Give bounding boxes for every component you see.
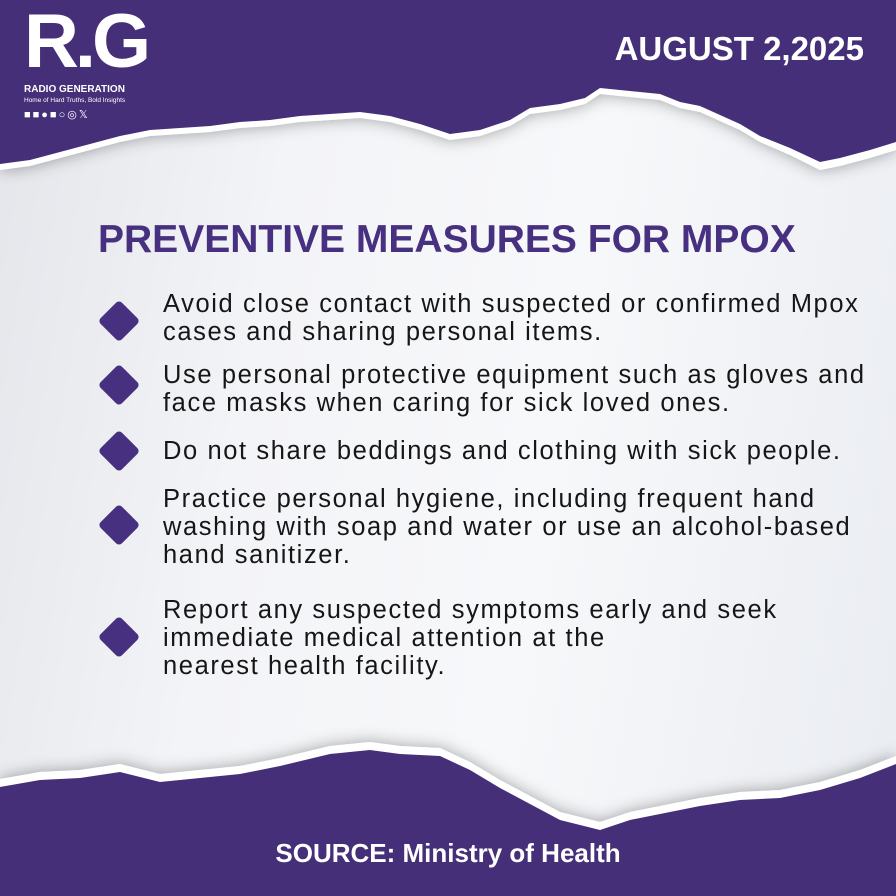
title: PREVENTIVE MEASURES FOR MPOX	[98, 218, 796, 261]
bullets: Do not share beddings and clothing with sick people.	[163, 437, 842, 465]
bullets: cases and sharing personal items.	[163, 318, 603, 346]
logo: R.G	[24, 0, 147, 84]
bullets: washing with soap and water or use an alcohol-based	[163, 513, 851, 541]
bullets: nearest health facility.	[163, 652, 446, 680]
logo: ■■●■○◎𝕏	[24, 109, 90, 121]
logo: Home of Hard Truths, Bold Insights	[24, 97, 125, 104]
bullets: hand sanitizer.	[163, 541, 351, 569]
bullets: Use personal protective equipment such as gloves and	[163, 361, 866, 389]
logo	[24, 0, 147, 121]
bullets: Practice personal hygiene, including frequent hand	[163, 485, 816, 513]
bullets	[99, 290, 866, 680]
bullets: Avoid close contact with suspected or confirmed Mpox	[163, 290, 859, 318]
bullets: immediate medical attention at the	[163, 624, 606, 652]
source: SOURCE: Ministry of Health	[275, 838, 621, 868]
date: AUGUST 2,2025	[615, 30, 864, 67]
bullets: Report any suspected symptoms early and seek	[163, 596, 778, 624]
logo: RADIO GENERATION	[24, 84, 125, 95]
bullets: face masks when caring for sick loved ones.	[163, 389, 731, 417]
